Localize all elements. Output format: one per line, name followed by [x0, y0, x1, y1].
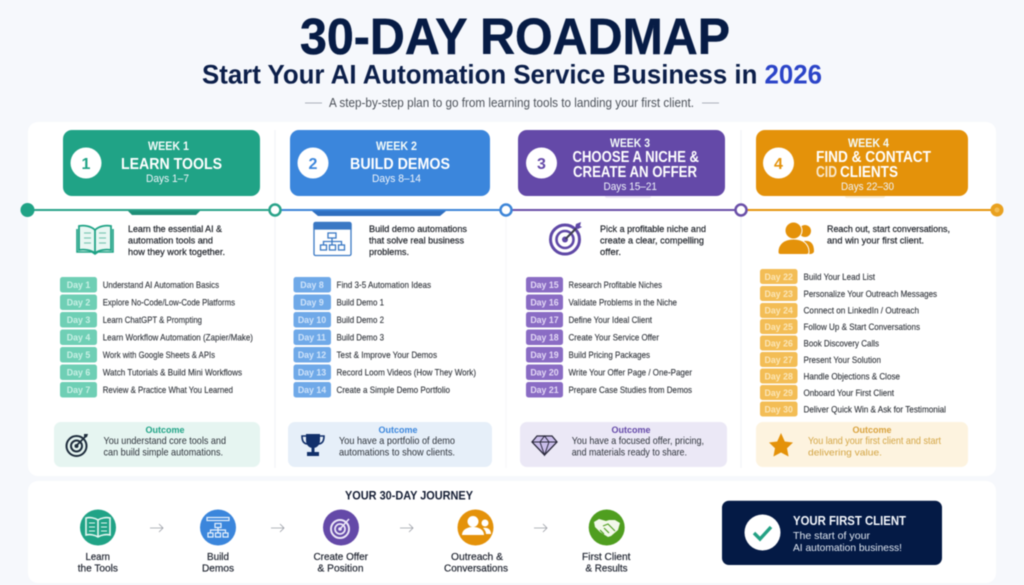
- panel: week 4: [756, 130, 968, 467]
- panel: week 1: [54, 130, 260, 467]
- week 1 day list: Review & Practice What You Learned: [103, 385, 233, 395]
- panel: 30-day journey: [28, 481, 996, 583]
- week 4 day list: Onboard Your First Client: [804, 388, 894, 398]
- panel: weekly roadmap background: [28, 122, 996, 476]
- week 2 description: Build demo automations: [369, 224, 467, 235]
- title: 30-DAY ROADMAP: [300, 8, 730, 65]
- step: outreach: Outreach &: [451, 551, 503, 563]
- week 3 description: Pick a profitable niche and: [600, 224, 706, 235]
- week 2 day list: Day 11: [298, 332, 326, 342]
- week 3 description: offer.: [600, 247, 621, 258]
- week 4 header: CLIENTS: [840, 164, 898, 181]
- week 1 day list: Day 5: [67, 350, 90, 360]
- week 4 header: FIND & CONTACT: [816, 149, 931, 166]
- step: create offer: Create Offer: [314, 551, 368, 563]
- week 4 day list: Connect on LinkedIn / Outreach: [804, 306, 919, 316]
- week 3 day list: Day 20: [530, 368, 559, 378]
- week 1 day list: Day 2: [67, 298, 90, 308]
- week 4 day list: Day 24: [765, 306, 793, 316]
- week 2 day list: Day 13: [298, 368, 326, 378]
- week 1 header: LEARN TOOLS: [121, 156, 222, 173]
- week 3 description: create a clear, compelling: [600, 236, 704, 246]
- week 4 day list: Handle Objections & Close: [804, 371, 900, 381]
- step: build demos: Demos: [202, 563, 234, 575]
- step: outreach: Conversations: [444, 563, 508, 575]
- week 1 day list: Learn ChatGPT & Prompting: [103, 315, 202, 325]
- week 2 day list: [294, 277, 476, 398]
- week 2 day list: Record Loom Videos (How They Work): [336, 368, 476, 378]
- week 2 description: problems.: [369, 247, 409, 258]
- week 4 day list: [760, 269, 946, 416]
- week 4 day list: Book Discovery Calls: [804, 338, 879, 348]
- week 1 outcome: Outcome: [145, 425, 185, 435]
- week 1 outcome: [54, 422, 260, 467]
- panel: week 2: [288, 130, 492, 467]
- week 4 day list: Personalize Your Outreach Messages: [804, 289, 937, 299]
- subtitle: Start Your AI Automation Service Business in 2026: [202, 60, 822, 90]
- week 3 header: 3: [537, 156, 546, 173]
- week 1 header: 1: [82, 156, 91, 173]
- step: outreach: [444, 510, 508, 575]
- week 3 header: WEEK 3: [610, 136, 650, 150]
- week 2 day list: Build Demo 1: [336, 298, 384, 308]
- timeline: [20, 203, 1004, 217]
- week 4 outcome: You land your first client and start: [808, 435, 941, 447]
- step: first client: & Results: [586, 563, 628, 575]
- callout: your first client: AI automation business!: [793, 542, 902, 554]
- week 1 description: automation tools and: [128, 236, 213, 246]
- week 1 description: how they work together.: [128, 247, 225, 258]
- step: learn the tools: the Tools: [78, 563, 118, 575]
- week 3 day list: Day 18: [530, 332, 559, 342]
- week 1 outcome: You understand core tools and: [104, 435, 226, 447]
- week 3 header: CREATE AN OFFER: [573, 164, 697, 181]
- week 3 day list: Build Pricing Packages: [568, 350, 650, 360]
- week 1 day list: Day 3: [67, 315, 90, 325]
- week 4 day list: Day 29: [765, 388, 793, 398]
- week 1 day list: Explore No-Code/Low-Code Platforms: [103, 298, 235, 308]
- week 1 description: [128, 224, 225, 258]
- week 2 outcome: You have a portfolio of demo: [339, 435, 455, 447]
- callout: your first client: The start of your: [793, 530, 871, 542]
- week 4 day list: Day 22: [765, 272, 793, 282]
- week 2 day list: Day 12: [298, 350, 326, 360]
- week 1 outcome: can build simple automations.: [104, 447, 223, 459]
- step: first client: [582, 510, 631, 575]
- week 4 day list: Build Your Lead List: [804, 272, 875, 282]
- week 3 day list: Research Profitable Niches: [568, 280, 662, 290]
- step: create offer: & Position: [318, 563, 364, 575]
- week 2 outcome: Outcome: [378, 425, 418, 435]
- week 2 description: [369, 224, 467, 258]
- callout: your first client: [722, 501, 942, 565]
- week 1 day list: Watch Tutorials & Build Mini Workflows: [103, 368, 242, 378]
- week 2 header: [290, 130, 490, 196]
- journey heading: YOUR 30-DAY JOURNEY: [345, 490, 473, 502]
- week 3 header: [518, 130, 725, 198]
- week 1 description: Learn the essential AI &: [128, 224, 223, 235]
- week 4 description: Reach out, start conversations,: [827, 224, 950, 235]
- week 1 day list: Day 6: [67, 368, 90, 378]
- week 3 header: Days 15–21: [604, 181, 657, 193]
- week 2 day list: Test & Improve Your Demos: [336, 350, 437, 360]
- week 4 day list: Deliver Quick Win & Ask for Testimonial: [804, 404, 946, 414]
- icon: people: [778, 222, 814, 254]
- week 3 day list: [526, 277, 692, 398]
- icon: target: [550, 222, 582, 254]
- week 4 day list: Day 25: [765, 322, 793, 332]
- week 2 day list: Day 10: [298, 315, 326, 325]
- week 4 day list: Day 26: [765, 338, 793, 348]
- step: create offer: [314, 510, 368, 575]
- week 3 day list: Day 19: [530, 350, 559, 360]
- week 2 header: WEEK 2: [376, 139, 417, 153]
- week 4 description: [827, 224, 950, 246]
- step: build demos: [200, 510, 236, 575]
- week 2 description: that solve real business: [369, 236, 464, 246]
- week 2 header: 2: [309, 156, 318, 173]
- week 3 outcome: Outcome: [611, 425, 651, 435]
- week 2 day list: Day 14: [298, 385, 326, 395]
- week 3 header: CHOOSE A NICHE &: [572, 149, 699, 166]
- panel: week 3: [518, 130, 727, 467]
- week 4 header: [756, 130, 968, 198]
- week 2 day list: Create a Simple Demo Portfolio: [336, 385, 450, 395]
- week 3 day list: Write Your Offer Page / One-Pager: [568, 368, 692, 378]
- week 1 day list: Day 1: [67, 280, 90, 290]
- week 4 header: 4: [774, 156, 783, 173]
- week 1 header: [63, 130, 260, 196]
- week 4 outcome: Outcome: [852, 425, 892, 435]
- week 3 description: [600, 224, 706, 258]
- tagline: A step-by-step plan to go from learning tools to landing your first client.: [329, 96, 694, 110]
- week 2 header: Days 8–14: [372, 173, 421, 185]
- week 4 day list: Day 30: [765, 404, 793, 414]
- week 3 day list: Define Your Ideal Client: [568, 315, 652, 325]
- week 4 day list: Day 27: [765, 355, 793, 365]
- week 3 day list: Validate Problems in the Niche: [568, 298, 677, 308]
- week 3 day list: Day 17: [530, 315, 559, 325]
- week 4 outcome: [756, 422, 968, 467]
- week 1 day list: Understand AI Automation Basics: [103, 280, 219, 290]
- week 2 day list: Day 8: [300, 280, 324, 290]
- week 4 day list: Follow Up & Start Conversations: [804, 322, 920, 332]
- week 3 day list: Day 16: [530, 298, 559, 308]
- week 1 day list: Work with Google Sheets & APIs: [103, 350, 215, 360]
- week 3 day list: Create Your Service Offer: [568, 332, 659, 342]
- week 2 day list: Build Demo 2: [336, 315, 384, 325]
- icon: open book: [77, 226, 113, 254]
- week 4 day list: Present Your Solution: [804, 355, 881, 365]
- step: first client: First Client: [582, 551, 631, 563]
- week 3 outcome: You have a focused offer, pricing,: [572, 435, 704, 447]
- week 4 outcome: delivering value.: [808, 448, 882, 459]
- week 2 day list: Find 3-5 Automation Ideas: [336, 280, 431, 290]
- week 4 day list: Day 23: [765, 289, 793, 299]
- week 3 outcome: and materials ready to share.: [572, 447, 687, 459]
- arrow: [400, 524, 413, 532]
- week 2 outcome: [288, 422, 492, 467]
- week 1 header: WEEK 1: [148, 139, 189, 153]
- step: build demos: Build: [207, 551, 229, 563]
- week 4 description: and win your first client.: [827, 236, 924, 246]
- week 1 day list: Day 7: [67, 385, 90, 395]
- icon: workflow window: [314, 222, 351, 256]
- step: learn the tools: [78, 510, 118, 575]
- week 4 day list: Day 28: [765, 371, 793, 381]
- week 2 header: BUILD DEMOS: [350, 156, 450, 173]
- week 2 day list: Day 9: [300, 298, 324, 308]
- week 1 day list: [60, 277, 253, 398]
- week 3 day list: Prepare Case Studies from Demos: [568, 385, 692, 395]
- callout: your first client: YOUR FIRST CLIENT: [793, 514, 906, 528]
- week 1 header: Days 1–7: [146, 173, 189, 185]
- arrow: [534, 524, 547, 532]
- week 1 day list: Day 4: [67, 332, 90, 342]
- week 2 day list: Build Demo 3: [336, 332, 384, 342]
- week 2 outcome: automations to show clients.: [339, 447, 455, 459]
- week 4 header: Days 22–30: [841, 181, 894, 193]
- week 4 header: WEEK 4: [848, 136, 889, 150]
- step: learn the tools: Learn: [86, 551, 110, 563]
- week 3 day list: Day 15: [530, 280, 559, 290]
- week 3 outcome: [520, 422, 727, 467]
- week 4 header: CID: [816, 164, 837, 181]
- arrow: [271, 524, 284, 532]
- week 1 day list: Learn Workflow Automation (Zapier/Make): [103, 332, 253, 342]
- week 3 day list: Day 21: [530, 385, 559, 395]
- arrow: [150, 524, 163, 532]
